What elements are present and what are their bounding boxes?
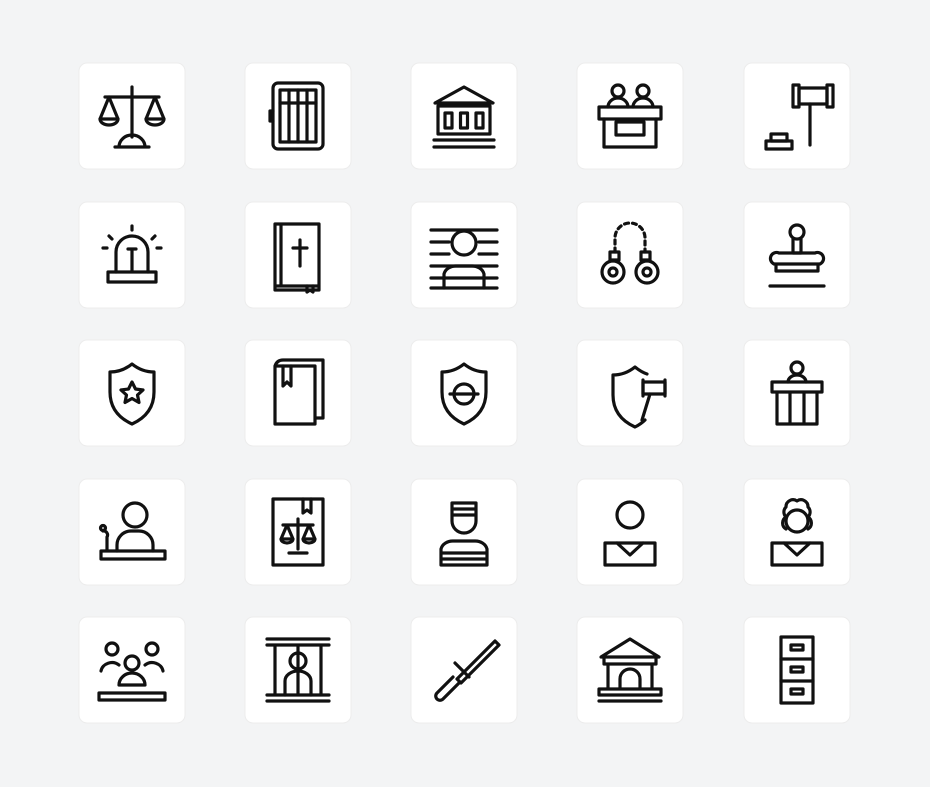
icon: law book bbox=[245, 479, 351, 585]
icon: prisoner bbox=[411, 479, 517, 585]
icon: police badge bbox=[79, 340, 185, 446]
icon: two judges desk bbox=[577, 63, 683, 169]
icon: bible bbox=[245, 202, 351, 308]
icon: group bbox=[79, 617, 185, 723]
icon: shield circle bbox=[411, 340, 517, 446]
icon: courthouse arch bbox=[577, 617, 683, 723]
icon: siren bbox=[79, 202, 185, 308]
icon: podium speaker bbox=[744, 340, 850, 446]
icon: gavel bbox=[744, 63, 850, 169]
icon: shield gavel bbox=[577, 340, 683, 446]
icon: mugshot bbox=[411, 202, 517, 308]
icon: baton bbox=[411, 617, 517, 723]
icon: person behind bars bbox=[245, 617, 351, 723]
icon: stamp bbox=[744, 202, 850, 308]
icon: jail door bbox=[245, 63, 351, 169]
icon: book bookmark bbox=[245, 340, 351, 446]
icon: handcuffs bbox=[577, 202, 683, 308]
icon: filing cabinet bbox=[744, 617, 850, 723]
icon: scales bbox=[79, 63, 185, 169]
icon: judge wig bbox=[744, 479, 850, 585]
icon: lawyer bbox=[577, 479, 683, 585]
icon: courthouse bbox=[411, 63, 517, 169]
icon: person at mic desk bbox=[79, 479, 185, 585]
